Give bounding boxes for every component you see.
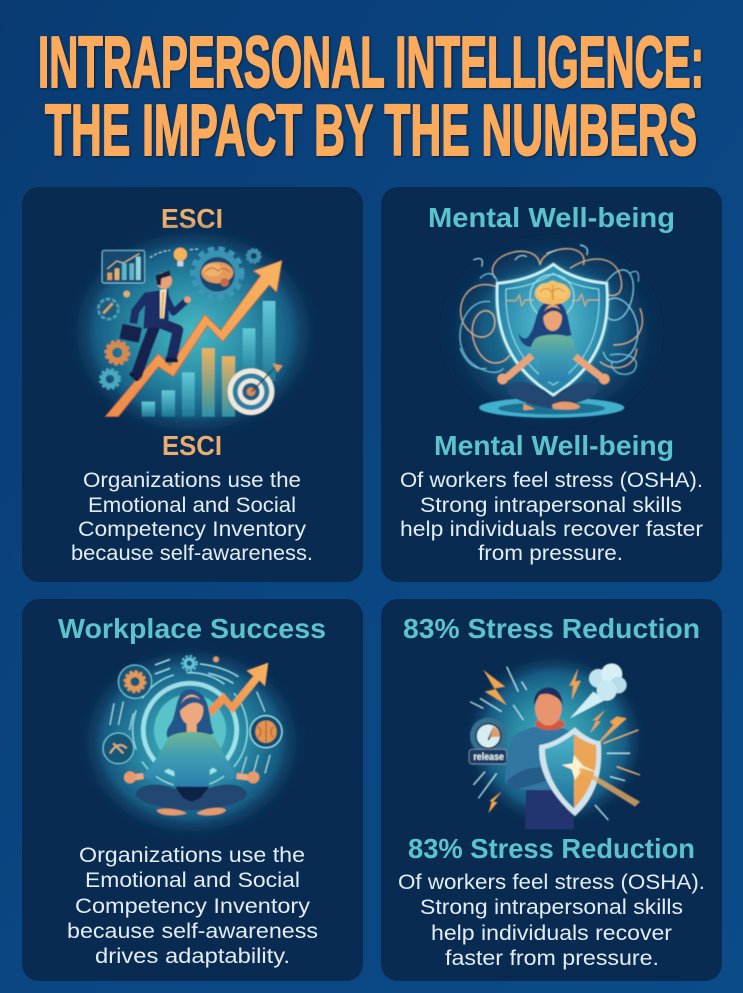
body text: Mental Well-being: Strong intrapersonal skills (420, 493, 682, 517)
bolts (483, 668, 645, 813)
woman (124, 689, 259, 815)
body text: Mental Well-being: help individuals recover faster (400, 517, 703, 541)
body text: ESCI: Emotional and Social (88, 493, 296, 517)
woman (479, 303, 624, 418)
gauge (470, 718, 507, 754)
body text: ESCI (71, 468, 313, 565)
illustration: meditating woman with growth arrow (75, 642, 308, 842)
target (228, 363, 283, 415)
body text: 83% Stress Reduction: Of workers feel stress (OSHA). (398, 870, 705, 894)
swirling lines (460, 245, 642, 374)
teal gear (100, 369, 120, 389)
body text: Workplace Success: drives adaptability. (95, 944, 290, 968)
man (505, 687, 593, 829)
release label (469, 749, 507, 764)
panel background: ESCI (22, 187, 363, 582)
bulb (150, 248, 198, 266)
illustration: woman meditating before a shield (437, 232, 667, 432)
panel background: Workplace Success (22, 599, 363, 981)
brain circle (250, 716, 282, 748)
body text: 83% Stress Reduction: help individuals recover (431, 921, 672, 945)
body text: 83% Stress Reduction: faster from pressure. (445, 946, 659, 970)
gear circle (118, 665, 152, 698)
panel: ESCI (22, 187, 363, 582)
bar chart (142, 301, 275, 417)
panel: Workplace Success (22, 599, 363, 981)
panel: 83% Stress Reduction (381, 599, 722, 981)
key circle (103, 733, 134, 764)
illustration: man holding a shield against stress (462, 650, 648, 830)
shield (497, 264, 607, 395)
body text: ESCI: Organizations use the (83, 468, 301, 492)
release label: release (473, 752, 505, 763)
decorations (110, 692, 270, 773)
panel background: 83% Stress Reduction (381, 599, 722, 981)
body text: ESCI: Competency Inventory (78, 517, 306, 541)
rising arrow (105, 260, 282, 417)
body text: Workplace Success (67, 843, 318, 968)
title (38, 23, 704, 171)
gear with brain (193, 249, 242, 298)
body text: 83% Stress Reduction: Strong intrapersonal skills (420, 895, 683, 919)
small gear top right (247, 249, 261, 263)
pulse lines and halo (507, 275, 599, 319)
body text: Workplace Success: Organizations use the (79, 843, 305, 867)
businessman (119, 270, 191, 382)
panel background: Mental Well-being (381, 187, 722, 582)
top gear (155, 656, 238, 683)
heading: ESCI: ESCI (161, 203, 223, 234)
subheading: ESCI: ESCI (162, 430, 222, 461)
subheading: Mental Well-being: Mental Well-being (434, 430, 674, 461)
body text: Workplace Success: Competency Inventory (75, 894, 310, 918)
rings (133, 673, 247, 787)
body text: Workplace Success: because self-awareness (67, 919, 318, 943)
illustration: businessman climbing a rising arrow (63, 222, 323, 442)
rays and small bolts (470, 667, 640, 820)
heading: 83% Stress Reduction: 83% Stress Reduction (403, 613, 700, 644)
body text: Mental Well-being: from pressure. (478, 541, 623, 565)
body text: Mental Well-being: Of workers feel stress (OSHA). (400, 468, 703, 492)
key gear (98, 291, 130, 319)
body text: Workplace Success: Emotional and Social (85, 868, 300, 892)
shield (539, 727, 640, 816)
body text: 83% Stress Reduction (398, 870, 705, 970)
heading: Mental Well-being: Mental Well-being (428, 202, 675, 233)
brain (535, 281, 571, 305)
body text: Mental Well-being (400, 468, 703, 565)
heading: Workplace Success: Workplace Success (58, 613, 326, 644)
mini chart (102, 250, 145, 283)
cloud of steam (570, 663, 627, 718)
body text: ESCI: because self-awareness. (71, 541, 313, 565)
growth arrow (208, 663, 268, 717)
subheading: 83% Stress Reduction: 83% Stress Reduction (408, 833, 695, 864)
orange gear (106, 341, 129, 364)
panel: Mental Well-being (381, 187, 722, 582)
